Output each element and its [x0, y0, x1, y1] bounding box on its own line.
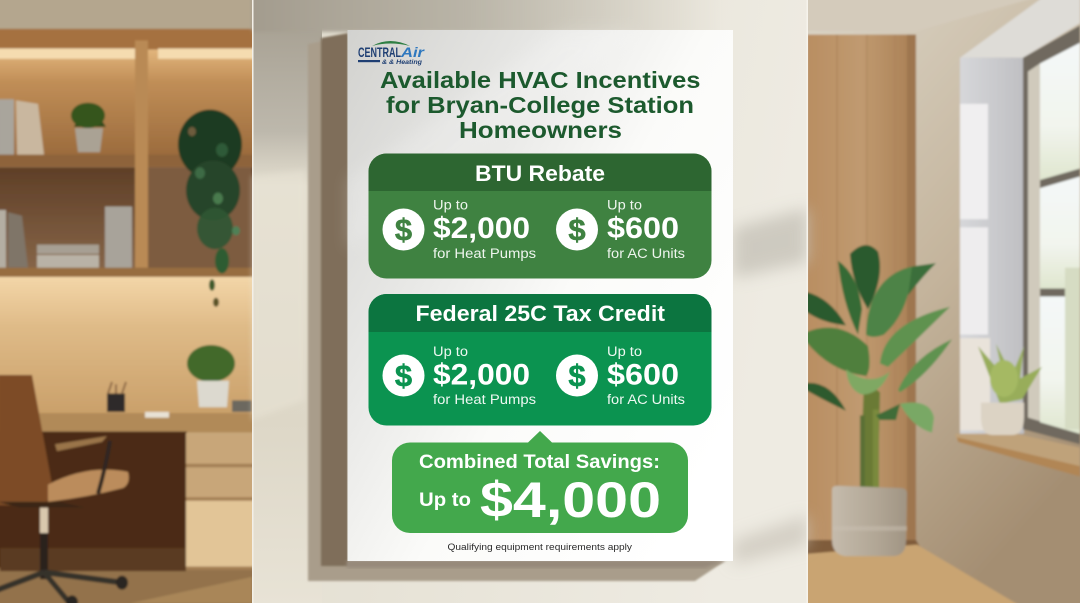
- icon: dollar coin: [556, 354, 598, 396]
- background: blurred room at right: [805, 0, 1080, 603]
- logo: Central Air & Heating: Air: [400, 44, 426, 60]
- plant: trailing ivy: [178, 110, 242, 307]
- logo: Central Air & Heating: CENTRAL: [358, 44, 401, 60]
- window sill: [955, 434, 1080, 477]
- window recess: [960, 0, 1080, 434]
- wall panel behind poster: [252, 0, 808, 603]
- total amount: $4,000: [480, 472, 661, 528]
- icon: dollar coin: $: [395, 358, 412, 393]
- title: Homeowners: [459, 117, 622, 143]
- icon: dollar coin: [382, 208, 424, 250]
- AC unit rebate amount: [607, 198, 685, 261]
- background: blurred office at left: [0, 0, 255, 603]
- BTU Rebate header band: [368, 154, 712, 191]
- combined savings heading: Combined Total Savings:: [419, 451, 660, 473]
- callout: combined total savings: [392, 431, 688, 533]
- window frame and panes: [1023, 25, 1080, 444]
- footnote: Qualifying equipment requirements apply: [448, 542, 632, 553]
- plant: large floor plant: [806, 245, 952, 490]
- icon: dollar coin: [556, 208, 598, 250]
- BTU Rebate heading: BTU Rebate: [475, 161, 605, 186]
- Federal header band: [368, 294, 712, 332]
- icon: dollar coin: [382, 354, 424, 396]
- title: for Bryan-College Station: [386, 92, 694, 118]
- icon: dollar coin: $: [568, 358, 586, 393]
- heat pump rebate amount: [433, 198, 536, 261]
- AC unit credit amount: [607, 344, 685, 407]
- logo: Central Air & Heating: & & Heating: [382, 59, 422, 66]
- books: upper shelf: [0, 99, 44, 155]
- icon: dollar coin: $: [395, 212, 412, 247]
- AC unit rebate amount: $600: [607, 212, 679, 245]
- poster sheet: [348, 30, 733, 561]
- title: [380, 67, 700, 143]
- AC unit credit amount: for AC Units: [607, 392, 685, 407]
- heat pump rebate amount: $2,000: [433, 212, 530, 245]
- icon: dollar coin: $: [568, 212, 586, 247]
- title: Available HVAC Incentives: [380, 67, 700, 93]
- pen cup and desk items: [107, 382, 252, 418]
- plant: upper shelf: [71, 103, 106, 152]
- plant: desk pot: [187, 345, 235, 407]
- heat pump credit amount: Up to: [433, 344, 468, 359]
- heat pump rebate amount: Up to: [433, 198, 468, 212]
- panel: Federal 25C Tax Credit: [368, 294, 712, 426]
- heat pump credit amount: for Heat Pumps: [433, 392, 536, 407]
- plant: window sill: [978, 344, 1042, 435]
- heat pump rebate amount: for Heat Pumps: [433, 246, 536, 261]
- office chair: [0, 375, 129, 603]
- AC unit rebate amount: for AC Units: [607, 246, 685, 261]
- heat pump credit amount: [433, 344, 536, 407]
- books: middle shelf: [0, 207, 132, 268]
- poster cast shadow: [308, 33, 727, 581]
- panel: BTU Rebate: [368, 154, 712, 278]
- Federal heading: Federal 25C Tax Credit: [416, 301, 666, 326]
- floor pot: [832, 486, 907, 556]
- AC unit credit amount: $600: [607, 358, 679, 392]
- AC unit credit amount: Up to: [607, 344, 642, 359]
- AC unit rebate amount: Up to: [607, 198, 642, 212]
- up to label: Up to: [419, 490, 471, 511]
- heat pump credit amount: $2,000: [433, 358, 530, 392]
- logo: Central Air & Heating: [358, 41, 426, 66]
